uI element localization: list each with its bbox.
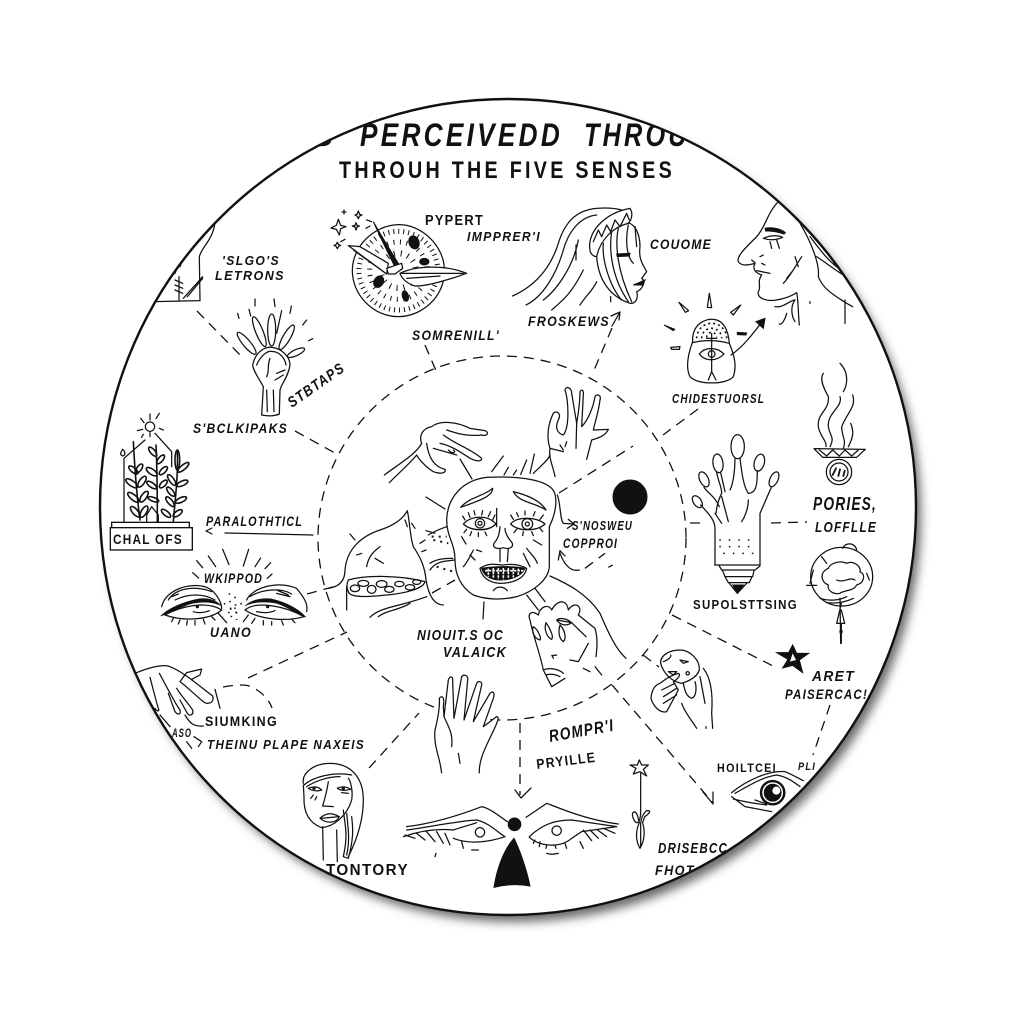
- labels: centre: COPPROI: [563, 535, 618, 551]
- labels: hoiltcei and plt: [717, 761, 816, 775]
- star wand flower: [630, 760, 650, 848]
- labels: wkippod and uano: [204, 574, 262, 637]
- label: slgo's letrons: 'SLGO'S: [222, 253, 280, 268]
- small head with eye and arrow: [664, 293, 765, 383]
- title: THROUH THE FIVE SENSES: [339, 157, 675, 184]
- title: S: [312, 117, 337, 153]
- man profile with big nose: [738, 202, 853, 325]
- label: somrenill: SOMRENILL': [412, 327, 500, 343]
- inner dashed circle: [318, 356, 686, 720]
- hand at lower left edge: [135, 666, 220, 748]
- labels: centre: NIOUIT.S OC: [417, 627, 504, 644]
- labels: wkippod and uano: UANO: [210, 624, 252, 640]
- labels: sivmking, aso and theinu: [171, 713, 365, 752]
- label: slgo's letrons: LETRONS: [215, 268, 285, 283]
- labels: centre: VALAICK: [443, 644, 507, 661]
- label: aret paisercac: PAISERCAC!: [785, 686, 868, 702]
- labels: hoiltcei and plt: PLI: [798, 761, 816, 773]
- connector lines: [197, 311, 830, 804]
- labels: hoiltcei and plt: HOILTCEI: [717, 761, 777, 775]
- label: supolststsing: SUPOLSTTSING: [693, 597, 798, 612]
- hand fragment at edge: [155, 222, 215, 302]
- label: chal ofs: CHAL OFS: [113, 531, 183, 547]
- black star: [777, 645, 809, 673]
- label: pypert impprer'i: [426, 215, 540, 241]
- onion shape with seeds: [328, 511, 454, 617]
- label: aret paisercac: ARET: [811, 668, 855, 685]
- hand: upper right: [492, 388, 608, 477]
- labels: wkippod and uano: WKIPPOD: [204, 570, 263, 586]
- labels: centre: [417, 518, 633, 661]
- label: couome: COUOME: [650, 236, 712, 252]
- labels: rompr'i pryille: ROMPR'I: [547, 716, 616, 746]
- label: paralothticl: PARALOTHTICL: [206, 513, 303, 529]
- label: aret paisercac: [785, 671, 867, 699]
- hand holding mask: [651, 650, 713, 728]
- label: stbtaps: STBTAPS: [285, 359, 348, 411]
- disc contents: [110, 117, 877, 887]
- central face: [447, 477, 574, 599]
- label: chidestuorsl: CHIDESTUORSL: [672, 391, 765, 406]
- label: pories loffle: LOFFLLE: [815, 519, 877, 536]
- woman face with long hair: [303, 763, 363, 862]
- hand: lower right of centre: [527, 576, 626, 687]
- bulb-fingered hand: [690, 435, 781, 593]
- labels: rompr'i pryille: PRYILLE: [535, 749, 597, 772]
- disc shadow: [107, 108, 921, 922]
- black circle: [613, 480, 647, 514]
- smoke bowl and button: [814, 363, 865, 485]
- disc: [100, 99, 916, 915]
- labels: rompr'i pryille: [535, 716, 616, 772]
- labels: sivmking, aso and theinu: ASO: [171, 726, 192, 740]
- labels: centre: S'NOSWEU: [572, 518, 633, 533]
- plant greenhouse icon: [110, 413, 192, 550]
- labels: sivmking, aso and theinu: THEINU PLAPE NAXEIS: [207, 737, 365, 752]
- label: froskews with arrow: FROSKEWS: [528, 313, 610, 329]
- label: s'bcklipaks: S'BCLKIPAKS: [193, 420, 288, 436]
- fan-shaped hand: [235, 299, 313, 416]
- labels: sivmking, aso and theinu: SIUMKING: [205, 713, 278, 729]
- bottom eyes, dot and triangle: [403, 803, 618, 887]
- hand: bottom centre: [435, 675, 498, 773]
- labels: drisebcc fhot: [655, 840, 728, 878]
- label: sontory: TONTORY: [326, 862, 409, 879]
- labels: drisebcc fhot: FHOT: [655, 862, 695, 878]
- label: pories loffle: PORIES,: [813, 494, 877, 514]
- clock disc with blades: [331, 210, 467, 317]
- title: PERCEIVEDD: [360, 117, 563, 153]
- staring eye: [732, 771, 803, 812]
- woman with crown: [513, 208, 647, 310]
- title: [320, 123, 684, 178]
- label: pypert impprer'i: PYPERT: [425, 212, 484, 229]
- hand: upper left: [384, 422, 487, 483]
- label: pypert impprer'i: IMPPRER'I: [467, 229, 541, 244]
- label: pories loffle: [813, 497, 876, 532]
- label: slgo's letrons: [215, 256, 284, 280]
- labels: drisebcc fhot: DRISEBCC: [658, 840, 728, 857]
- globe with cloud: [807, 544, 873, 643]
- curved arrow: [558, 551, 613, 570]
- pair of eyes with rays: [161, 549, 307, 625]
- title: THROUGH: [584, 117, 734, 153]
